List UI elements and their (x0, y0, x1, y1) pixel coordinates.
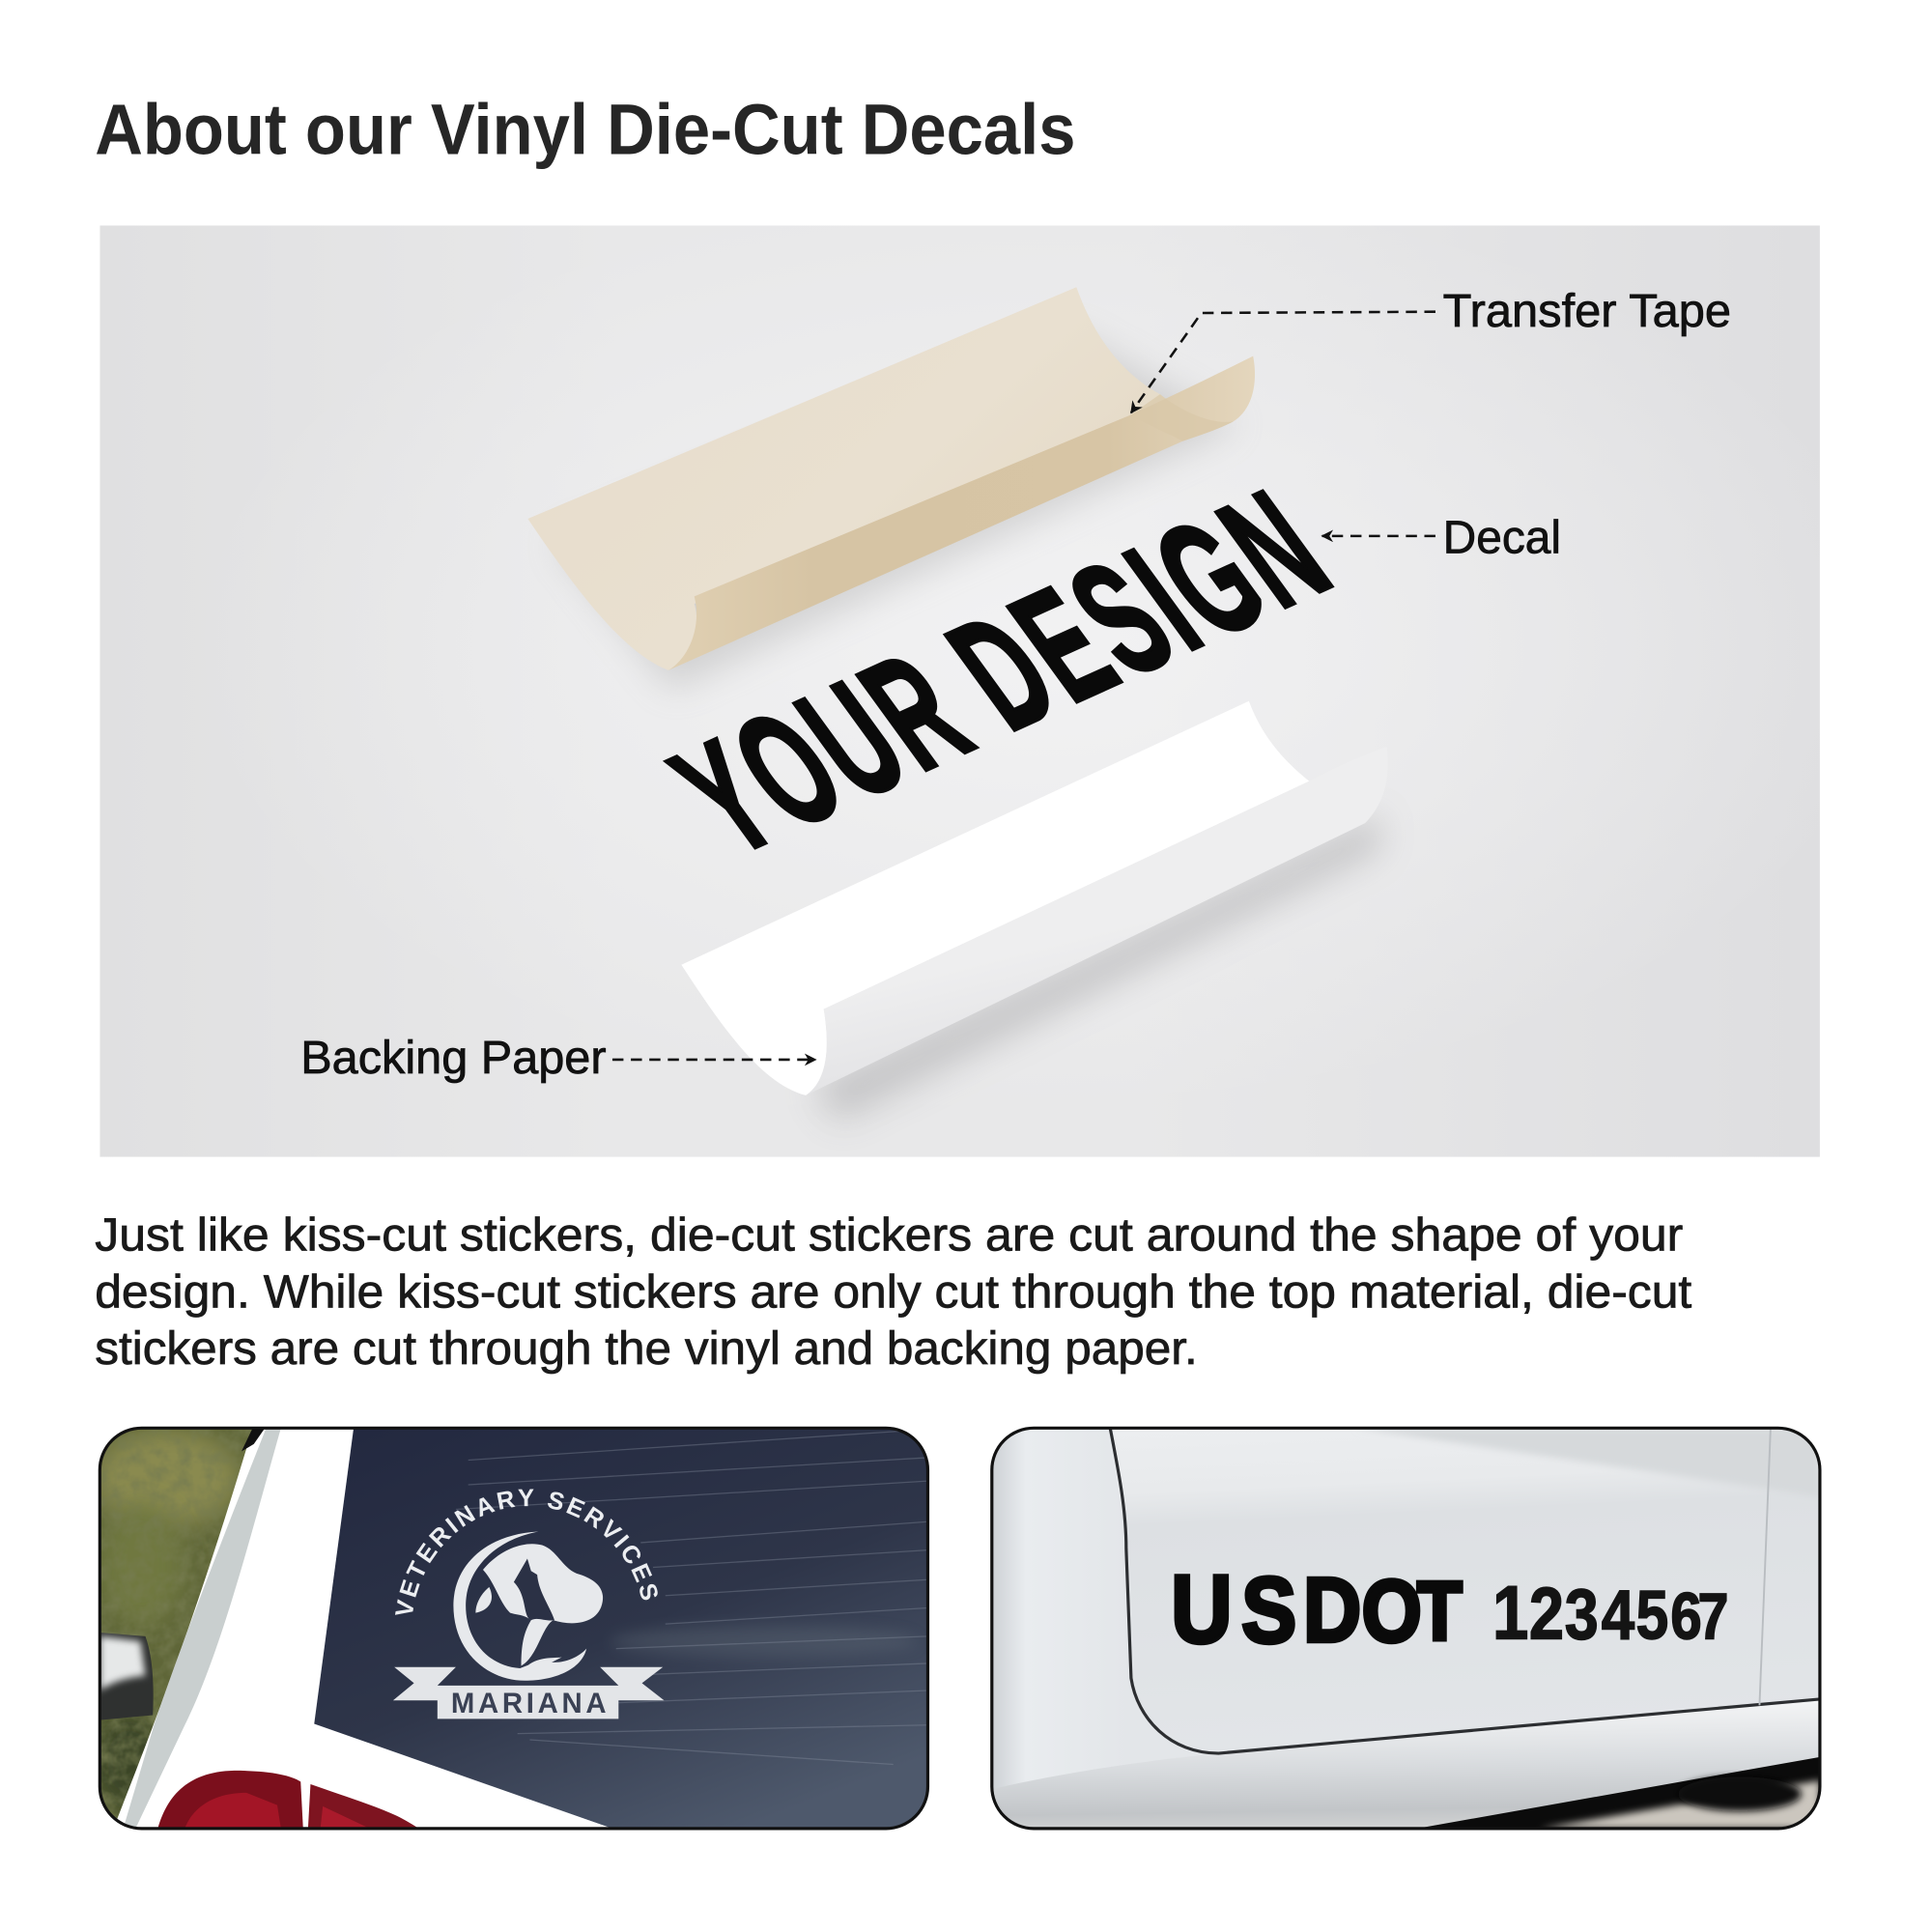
decal: usdot text (1171, 1555, 1728, 1662)
taillight (157, 1771, 421, 1829)
under-body shadow (1417, 1757, 1820, 1829)
text block: description: stickers are cut through the vinyl and backing paper. (95, 1322, 1198, 1375)
arrow: transfer tape (1131, 312, 1435, 412)
door panel (1114, 1430, 1360, 1443)
decal: usdot text: 2 (1529, 1574, 1564, 1656)
decal: usdot text: 5 (1635, 1577, 1668, 1655)
dog and cat silhouette (475, 1544, 603, 1665)
car pillar (117, 1430, 280, 1828)
decal: your design: YOUR DESIGN (642, 458, 1359, 887)
rear window glass (314, 1428, 927, 1829)
decal: usdot text: 7 (1697, 1580, 1728, 1654)
photo frame (992, 1428, 1820, 1829)
rear door seam (1759, 1428, 1771, 1705)
left body panel shading (993, 1438, 1009, 1789)
side mirror (99, 1633, 154, 1720)
panel background (99, 225, 1820, 1157)
transfer tape sheet (527, 287, 1255, 690)
decal: usdot text: 4 (1602, 1577, 1635, 1655)
decal: usdot text: 1 (1492, 1570, 1528, 1656)
foliage background (100, 1430, 252, 1819)
panel: car window decal photo (99, 1426, 929, 1830)
rear quarter white body (394, 1814, 609, 1828)
upper door reflection band (1379, 1430, 1818, 1492)
decal: usdot text: 3 (1565, 1575, 1599, 1655)
decal: veterinary services logo: VETERINARY SERVICES (395, 1490, 658, 1615)
arrow: backing paper (612, 1059, 815, 1061)
banner text: MARIANA (451, 1688, 607, 1719)
label: decal: Decal (1443, 512, 1561, 564)
decal: usdot text: S (1241, 1558, 1296, 1662)
arrow: decal (1322, 535, 1435, 537)
ribbon banner (393, 1667, 665, 1719)
panel: van door decal photo (992, 1428, 1820, 1829)
decal: usdot text: D (1303, 1559, 1361, 1661)
title: About our Vinyl Die-Cut Decals (95, 89, 1076, 169)
decal: veterinary services logo (393, 1490, 665, 1719)
window heating lines (456, 1430, 927, 1765)
label: backing paper: Backing Paper (300, 1032, 607, 1084)
van body (1127, 1625, 1208, 1764)
crescent (453, 1531, 586, 1681)
window reflection (610, 1625, 918, 1658)
text block: description: Just like kiss-cut stickers, die-cut stickers are cut around the shape of your (95, 1209, 1683, 1262)
arc text (412, 1506, 645, 1618)
text block: description: design. While kiss-cut stickers are only cut through the top material, die-cut (95, 1265, 1692, 1318)
panel: vinyl decal layers diagram (99, 225, 1820, 1157)
decal: usdot text: T (1417, 1565, 1463, 1659)
door seam (1110, 1428, 1820, 1753)
rocker panel (992, 1699, 1820, 1829)
ground and tyre (1540, 1776, 1820, 1829)
label: transfer tape: Transfer Tape (1443, 285, 1731, 337)
backing paper sheet (681, 701, 1388, 1122)
decal: usdot text: 6 (1670, 1578, 1702, 1654)
photo frame (99, 1428, 927, 1829)
decal: usdot text: U (1171, 1555, 1232, 1662)
decal: usdot text: O (1362, 1563, 1422, 1661)
